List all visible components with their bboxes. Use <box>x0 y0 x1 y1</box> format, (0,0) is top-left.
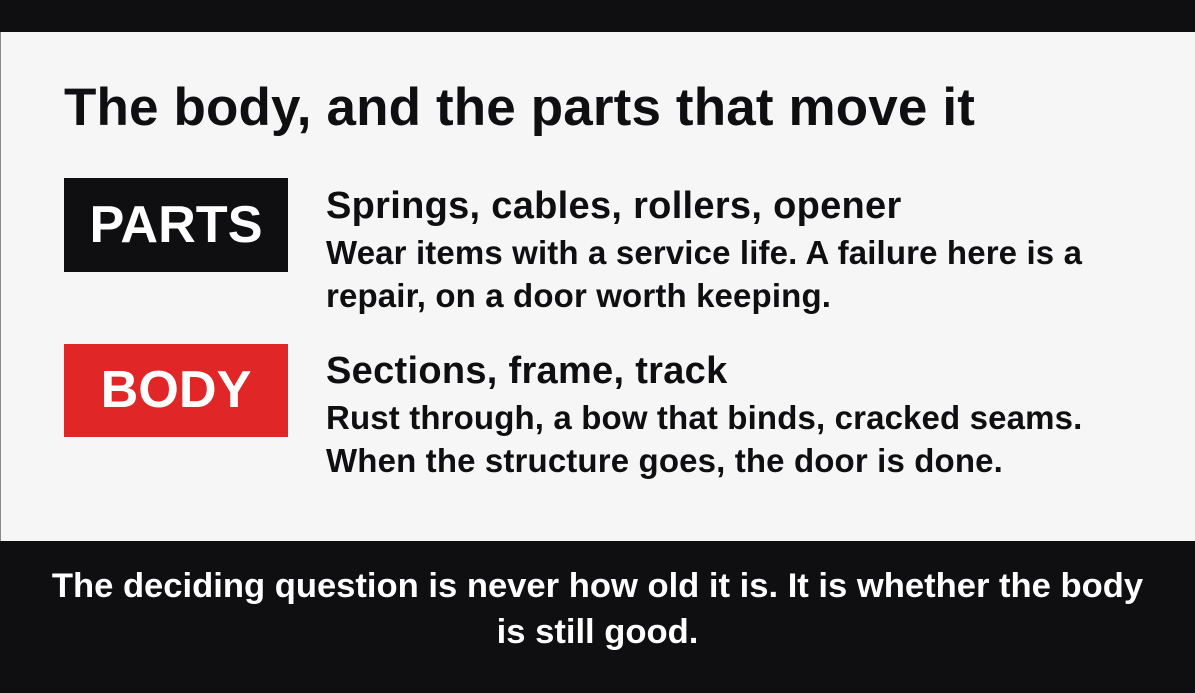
body badge <box>64 344 288 437</box>
body description: Rust through, a bow that binds, cracked seams. <box>326 399 1082 436</box>
conclusion text: The deciding question is never how old it is. It is whether the body <box>52 567 1143 605</box>
body description <box>326 399 1082 479</box>
bottom banner <box>0 541 1195 693</box>
panel: parts <box>64 178 1082 314</box>
parts description: Wear items with a service life. A failure here is a <box>326 234 1082 271</box>
body description: When the structure goes, the door is done. <box>326 442 1003 479</box>
conclusion text <box>52 567 1143 651</box>
parts description <box>326 234 1082 314</box>
parts badge: PARTS <box>90 196 262 254</box>
conclusion text: is still good. <box>497 613 698 651</box>
panel: body <box>64 344 1082 479</box>
title: The body, and the parts that move it <box>64 78 975 137</box>
parts badge <box>64 178 288 272</box>
body heading: Sections, frame, track <box>326 350 728 392</box>
parts description: repair, on a door worth keeping. <box>326 277 831 314</box>
body badge: BODY <box>101 361 251 419</box>
top band <box>0 0 1195 32</box>
parts heading: Springs, cables, rollers, opener <box>326 185 902 227</box>
